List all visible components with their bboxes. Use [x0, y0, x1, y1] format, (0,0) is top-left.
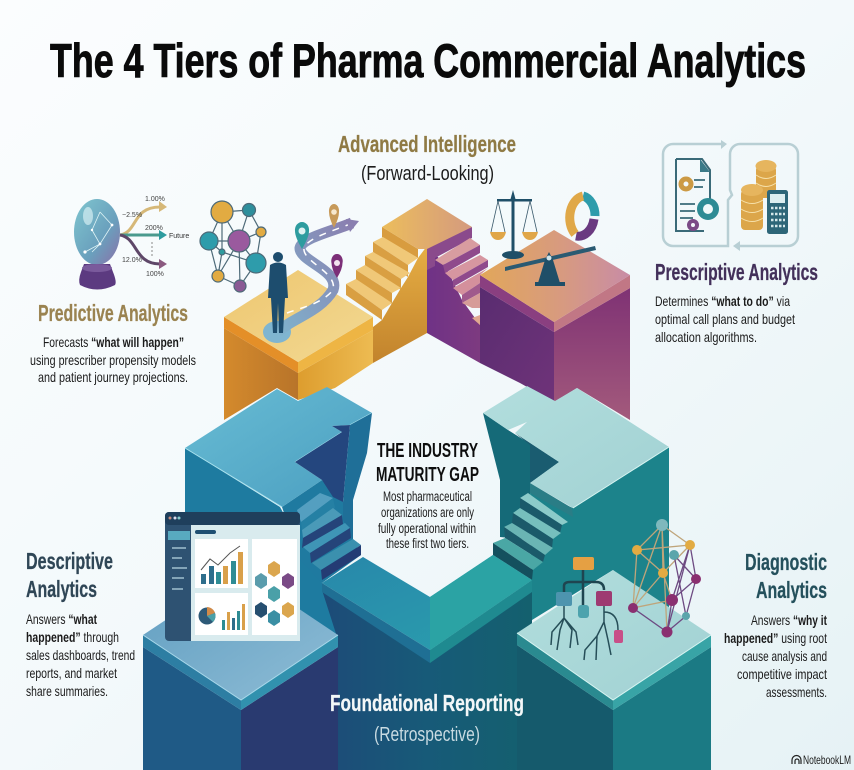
icon: seesaw — [505, 246, 596, 286]
icon: network — [200, 201, 266, 292]
icon: balance scales — [490, 190, 538, 259]
heading: descriptive analytics — [26, 548, 113, 602]
chart panel: bars and trend — [195, 539, 248, 588]
heading: advanced intelligence: Advanced Intelligence — [338, 131, 516, 157]
text: predictive description: Forecasts “what will happen” — [43, 334, 184, 350]
text: descriptive description: happened” through — [26, 629, 119, 645]
dashboard illustration — [165, 512, 300, 641]
icon: location pins — [295, 204, 343, 278]
text: prescriptive description: optimal call plans and budget — [655, 311, 795, 327]
panel: diagnostic block — [517, 570, 711, 770]
text: predictive description: and patient journey projections. — [38, 369, 188, 385]
heading: predictive analytics: Predictive Analytics — [38, 300, 188, 326]
lower tier: teal stair tower — [483, 386, 669, 650]
heading: advanced intelligence — [338, 131, 516, 185]
chart: forecast arrows: 200% — [145, 225, 163, 232]
heading: advanced intelligence: (Forward-Looking) — [361, 163, 494, 185]
text: predictive description — [30, 334, 196, 385]
text: diagnostic description: Answers “why it — [751, 612, 827, 628]
chart panel: hexagon network — [252, 539, 297, 635]
upper tier: summit landing — [382, 199, 472, 249]
chart: forecast arrows — [120, 196, 189, 278]
callout: industry maturity gap: fully operational within — [378, 521, 476, 536]
icon: coins and calculator — [741, 160, 788, 234]
icon: diagnostic network — [628, 519, 701, 638]
icon: person — [268, 252, 288, 333]
heading: foundational reporting: Foundational Reporting — [330, 690, 524, 716]
heading: descriptive analytics: Descriptive — [26, 548, 113, 574]
callout: industry maturity gap: THE INDUSTRY — [377, 440, 478, 462]
panel: purple platform — [480, 230, 630, 420]
callout: industry maturity gap: these first two tiers. — [386, 536, 469, 551]
text: descriptive description: reports, and market — [26, 665, 117, 681]
icon: crystal ball — [74, 199, 120, 290]
chart: forecast arrows: 1.00% — [145, 196, 165, 203]
heading: diagnostic analytics — [745, 549, 827, 603]
text: descriptive description: Answers “what — [26, 611, 97, 627]
text: prescriptive description — [655, 293, 795, 345]
foundational reporting base — [322, 555, 532, 770]
callout: industry maturity gap: organizations are only — [381, 505, 474, 520]
chart: forecast arrows: Future — [169, 233, 189, 240]
upper tier: gold stair tower — [346, 227, 427, 363]
upper tier: purple stair tower — [427, 227, 488, 363]
heading: foundational reporting — [330, 690, 524, 746]
callout: industry maturity gap: MATURITY GAP — [376, 464, 479, 486]
text: diagnostic description — [724, 612, 827, 700]
lower tier: blue stair tower — [185, 387, 372, 640]
heading: foundational reporting: (Retrospective) — [374, 724, 480, 746]
text: predictive description: using prescriber propensity models — [30, 352, 196, 368]
panel: descriptive block — [143, 570, 338, 770]
text: diagnostic description: competitive impact — [737, 666, 827, 682]
chart: forecast arrows: 100% — [146, 271, 164, 278]
text: prescriptive description: Determines “what to do” via — [655, 293, 790, 309]
chart panel: pie and bars — [195, 593, 248, 635]
icon: root cause tree — [551, 557, 623, 660]
icon: donut chart — [570, 196, 595, 236]
callout: industry maturity gap: Most pharmaceutical — [383, 489, 472, 504]
text: descriptive description: sales dashboards, trend — [26, 647, 135, 663]
text: prescriptive description: allocation algorithms. — [655, 329, 757, 345]
chart: forecast arrows: 12.0% — [122, 257, 142, 264]
callout: industry maturity gap — [376, 440, 479, 551]
panel: gold platform — [224, 270, 373, 420]
icon: road path — [263, 219, 359, 343]
text: descriptive description — [26, 611, 135, 699]
heading: descriptive analytics: Analytics — [26, 576, 97, 602]
icon: prescriptive workflow frames — [663, 140, 798, 251]
text: descriptive description: share summaries. — [26, 683, 108, 699]
text: diagnostic description: happened” using root — [724, 630, 827, 646]
text: diagnostic description: assessments. — [766, 684, 827, 700]
chart: forecast arrows: −2.5% — [122, 212, 142, 219]
